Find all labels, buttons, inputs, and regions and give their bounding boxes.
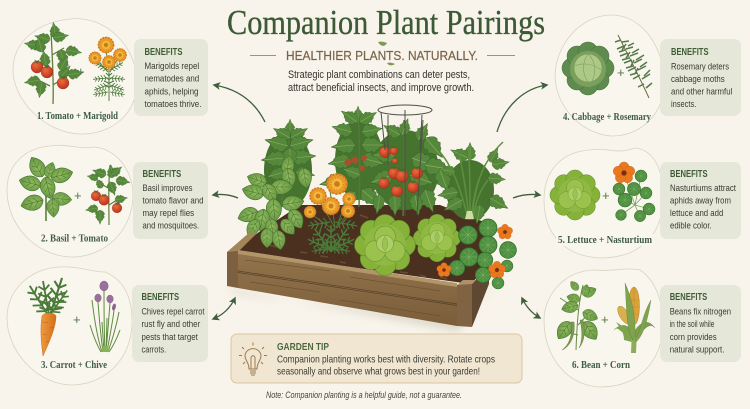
benefits: lettuce and nasturtium: lettuce and add xyxy=(670,208,723,219)
benefits: bean and corn: BENEFITS xyxy=(670,292,707,303)
plant: feathery herb xyxy=(305,225,357,256)
benefits: cabbage and rosemary: and other harmful xyxy=(671,86,732,98)
label background xyxy=(556,234,654,246)
benefits: cabbage and rosemary: cabbage moths xyxy=(671,74,725,85)
plant: basil bush xyxy=(236,155,313,251)
benefits: cabbage and rosemary xyxy=(660,39,741,116)
benefits: basil and tomato: BENEFITS xyxy=(142,169,181,180)
arrow: bed to lettuce nasturtium xyxy=(513,194,540,198)
benefits: basil and tomato: tomato flavor and xyxy=(142,196,204,206)
benefits: tomato and marigold: tomatoes thrive. xyxy=(144,99,202,110)
tomato cage xyxy=(378,105,432,216)
label: 3. Carrot + Chive xyxy=(41,360,107,371)
foliage mass behind plants xyxy=(264,120,494,220)
plant: caged tomato xyxy=(367,117,455,217)
icon: plus: + xyxy=(601,312,609,327)
benefits: lettuce and nasturtium: BENEFITS xyxy=(670,169,708,180)
plant: tomato back center xyxy=(318,106,387,211)
benefits: tomato and marigold: Marigolds repel xyxy=(144,61,199,72)
panel: basil and tomato xyxy=(7,145,133,257)
benefits: lettuce and nasturtium xyxy=(660,162,741,239)
benefits: carrot and chive: BENEFITS xyxy=(142,292,179,303)
benefits: carrot and chive: rust fly and other xyxy=(142,319,201,330)
arrow: bed to tomato marigold xyxy=(214,85,265,122)
benefits: bean and corn: corn provides xyxy=(670,332,717,343)
label: 2. Basil + Tomato xyxy=(41,234,108,244)
tip text: seasonally and observe what grows best in your garden! xyxy=(277,366,480,378)
garden tip callout xyxy=(231,334,522,383)
subtitle: HEALTHIER PLANTS. NATURALLY. xyxy=(286,48,478,63)
icon: plus: + xyxy=(74,188,82,203)
benefits: tomato and marigold: nematodes and xyxy=(144,74,199,85)
footnote: Note: Companion planting is a helpful guide, not a guarantee. xyxy=(266,390,462,400)
arrow: bed to bean corn xyxy=(522,298,540,318)
benefits: carrot and chive: carrots. xyxy=(142,344,166,356)
icon: lettuce xyxy=(550,170,600,220)
soil xyxy=(238,205,492,284)
icon: corn xyxy=(614,283,655,353)
icon: rosemary xyxy=(615,35,652,98)
icon: marigold xyxy=(89,37,127,101)
icon: tomato plant xyxy=(85,164,131,225)
intro text: attract beneficial insects, and improve growth. xyxy=(288,82,474,94)
icon: plus: + xyxy=(73,312,81,327)
panel: carrot and chive xyxy=(7,267,132,385)
arrow: bed to basil tomato xyxy=(213,194,238,198)
benefits: cabbage and rosemary: BENEFITS xyxy=(671,47,709,58)
panel: cabbage and rosemary xyxy=(555,15,664,136)
plant: tall herb back left xyxy=(260,119,317,215)
icon: plus: + xyxy=(77,64,85,79)
intro text xyxy=(288,69,474,94)
benefits: carrot and chive xyxy=(132,285,208,362)
benefits: cabbage and rosemary: Rosemary deters xyxy=(671,61,729,72)
arrow: bed to cabbage rosemary xyxy=(497,85,547,132)
subtitle xyxy=(250,42,515,65)
benefits: lettuce and nasturtium: Nasturtiums attract xyxy=(670,183,736,194)
icon: bean xyxy=(553,279,602,350)
arrow: bed to carrot chive xyxy=(213,298,235,319)
benefits: cabbage and rosemary: insects. xyxy=(671,99,696,110)
benefits: lettuce and nasturtium: aphids away from xyxy=(670,196,731,206)
benefits: basil and tomato: may repel flies xyxy=(142,208,194,219)
icon: carrot xyxy=(23,275,73,356)
benefits: basil and tomato: Basil improves xyxy=(142,183,193,194)
benefits: bean and corn xyxy=(660,285,741,362)
benefits: bean and corn: Beans fix nitrogen xyxy=(670,307,731,318)
plant: nasturtium xyxy=(437,219,516,289)
benefits: basil and tomato: and mosquitoes. xyxy=(142,220,199,232)
plant: lettuce pair xyxy=(354,214,461,276)
panel: tomato and marigold xyxy=(13,19,137,134)
label: 4. Cabbage + Rosemary xyxy=(563,112,652,123)
panel: lettuce and nasturtium xyxy=(544,148,663,258)
label: 1. Tomato + Marigold xyxy=(37,111,118,122)
plant: chives and herb xyxy=(436,142,511,225)
tip text: GARDEN TIP xyxy=(277,342,329,353)
bed shadow xyxy=(225,270,500,332)
tip text: Companion planting works best with diversity. Rotate crops xyxy=(277,354,495,366)
icon: plus: + xyxy=(617,65,625,80)
benefits: bean and corn: natural support. xyxy=(670,344,724,356)
icon: tomato plant xyxy=(23,21,85,104)
panel: bean and corn xyxy=(544,269,663,387)
label: 6. Bean + Corn xyxy=(572,360,630,371)
benefits: tomato and marigold xyxy=(134,39,208,116)
intro text: Strategic plant combinations can deter pests, xyxy=(288,69,470,81)
plant: marigolds xyxy=(304,174,358,231)
icon: chives xyxy=(90,281,120,352)
benefits: tomato and marigold: aphids, helping xyxy=(144,86,198,98)
benefits: bean and corn: in the soil while xyxy=(670,319,714,330)
icon: nasturtium xyxy=(613,162,655,222)
icon: cabbage xyxy=(562,42,614,95)
icon: plus: + xyxy=(602,188,610,203)
benefits: basil and tomato xyxy=(133,162,208,239)
raised garden bed illustration xyxy=(225,105,516,332)
benefits: carrot and chive: pests that target xyxy=(142,332,198,343)
icon: light bulb xyxy=(239,342,267,375)
benefits: tomato and marigold: BENEFITS xyxy=(144,47,183,58)
title: Companion Plant Pairings xyxy=(227,3,545,42)
benefits: lettuce and nasturtium: edible color. xyxy=(670,220,712,232)
tip text xyxy=(277,342,495,378)
wooden bed frame xyxy=(227,232,489,327)
benefits: carrot and chive: Chives repel carrot xyxy=(142,307,205,318)
label: 5. Lettuce + Nasturtium xyxy=(558,235,652,246)
icon: basil xyxy=(17,154,75,221)
